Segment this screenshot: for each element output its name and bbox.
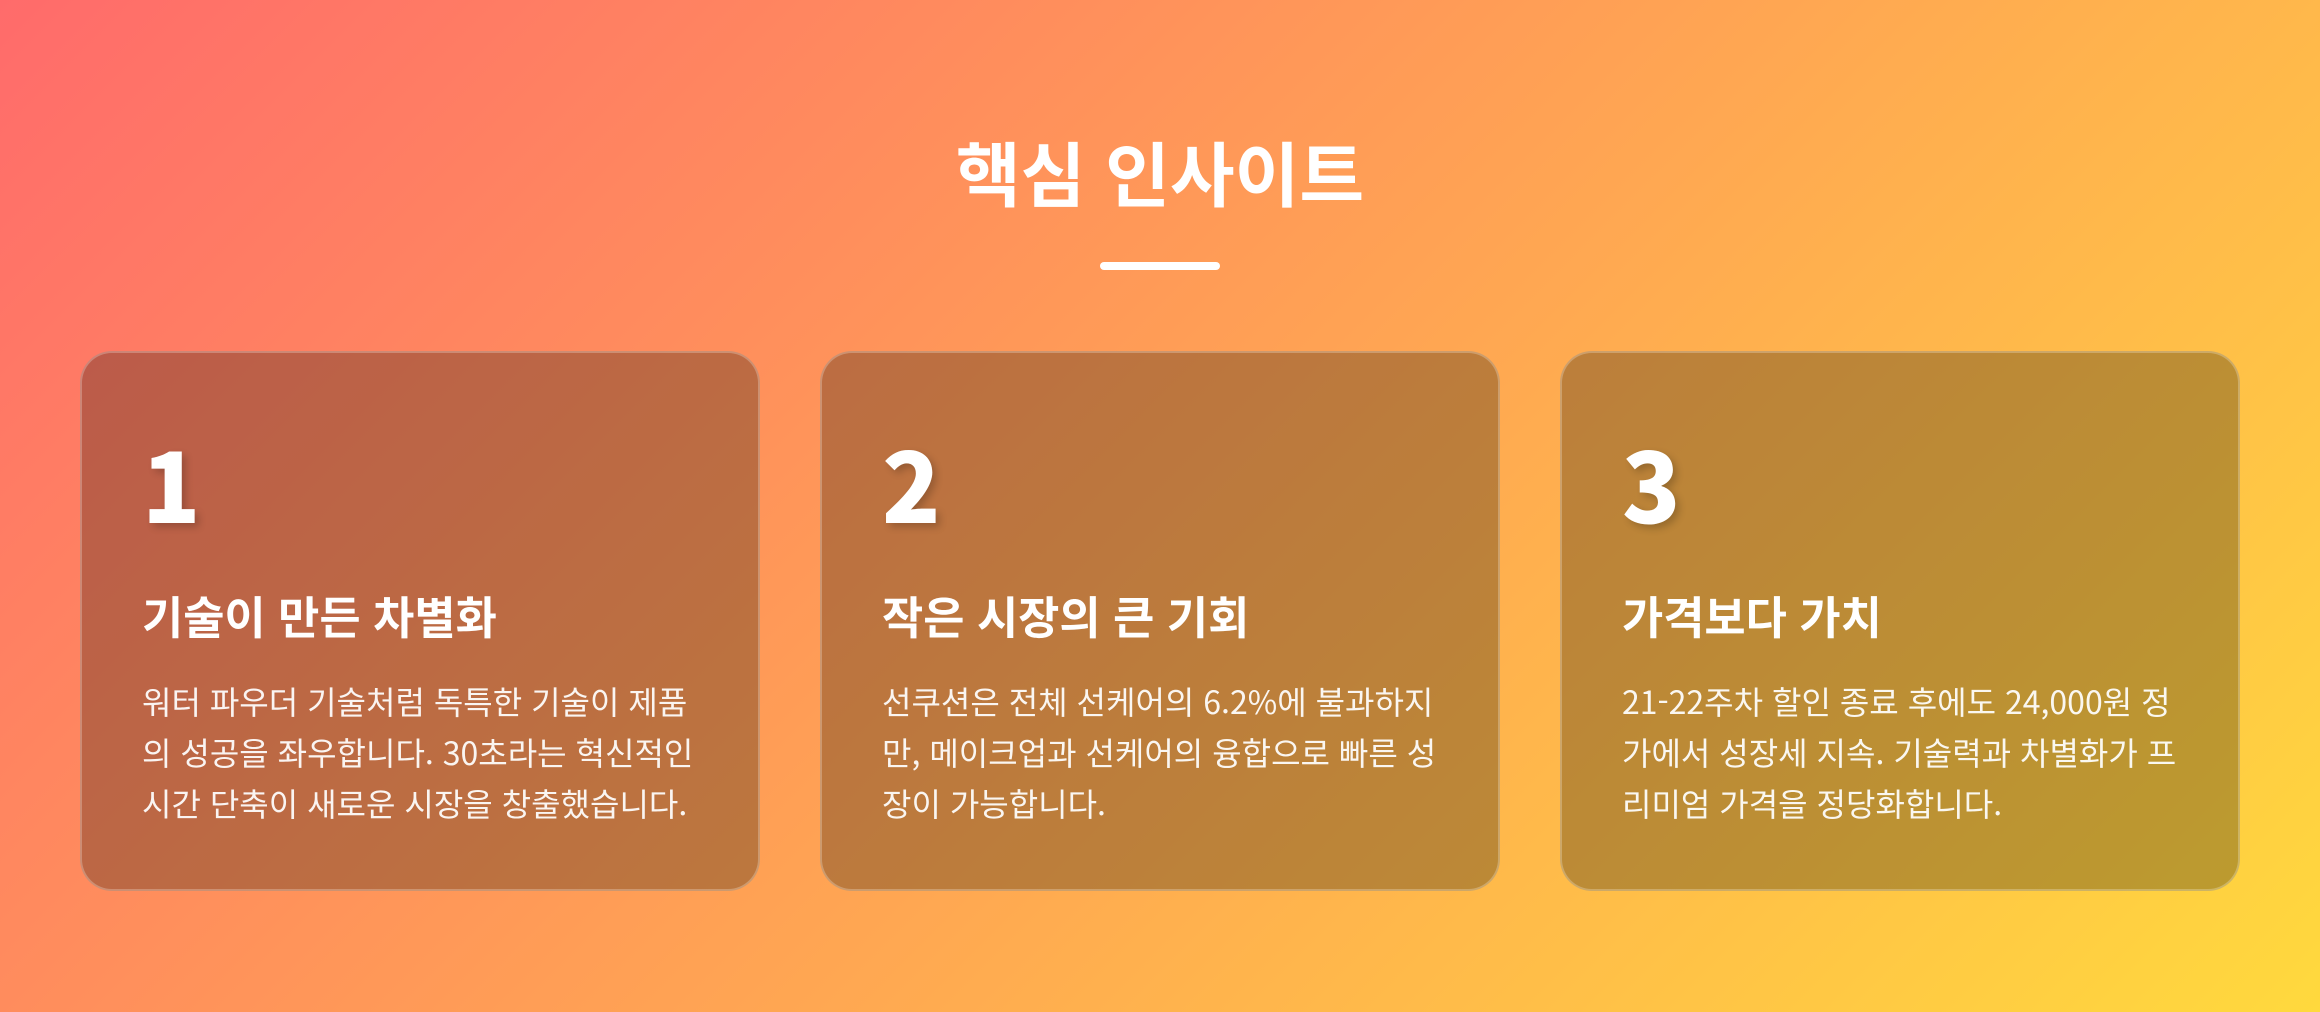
text: insight 2 xyxy=(882,678,1436,826)
text: insight 3 xyxy=(1622,678,2176,826)
text: insight 2: 선쿠션은 전체 선케어의 6.2%에 불과하지 xyxy=(882,678,1433,724)
number 1: 1 xyxy=(142,412,200,551)
panel: insight 2 xyxy=(820,351,1500,891)
text: insight 2: 장이 가능합니다. xyxy=(882,780,1106,826)
number 2: 2 xyxy=(882,412,940,551)
heading: insight 2: 작은 시장의 큰 기회 xyxy=(882,582,1249,647)
text: insight 1: 시간 단축이 새로운 시장을 창출했습니다. xyxy=(142,780,687,826)
text: insight 1: 워터 파우더 기술처럼 독특한 기술이 제품 xyxy=(142,678,687,724)
number 3: 3 xyxy=(1622,412,1680,551)
title underline xyxy=(1100,262,1220,270)
text: insight 3: 리미엄 가격을 정당화합니다. xyxy=(1622,780,2002,826)
text: insight 1 xyxy=(142,678,693,826)
panel: insight 1 xyxy=(80,351,760,891)
heading: insight 1: 기술이 만든 차별화 xyxy=(142,582,497,647)
heading: insight 3: 가격보다 가치 xyxy=(1622,582,1882,647)
text: insight 1: 의 성공을 좌우합니다. 30초라는 혁신적인 xyxy=(142,729,693,775)
text: insight 3: 21-22주차 할인 종료 후에도 24,000원 정 xyxy=(1622,678,2171,724)
text: insight 3: 가에서 성장세 지속. 기술력과 차별화가 프 xyxy=(1622,729,2176,775)
panel: insight 3 xyxy=(1560,351,2240,891)
title: 핵심 인사이트 xyxy=(956,120,1364,222)
text: insight 2: 만, 메이크업과 선케어의 융합으로 빠른 성 xyxy=(882,729,1436,775)
